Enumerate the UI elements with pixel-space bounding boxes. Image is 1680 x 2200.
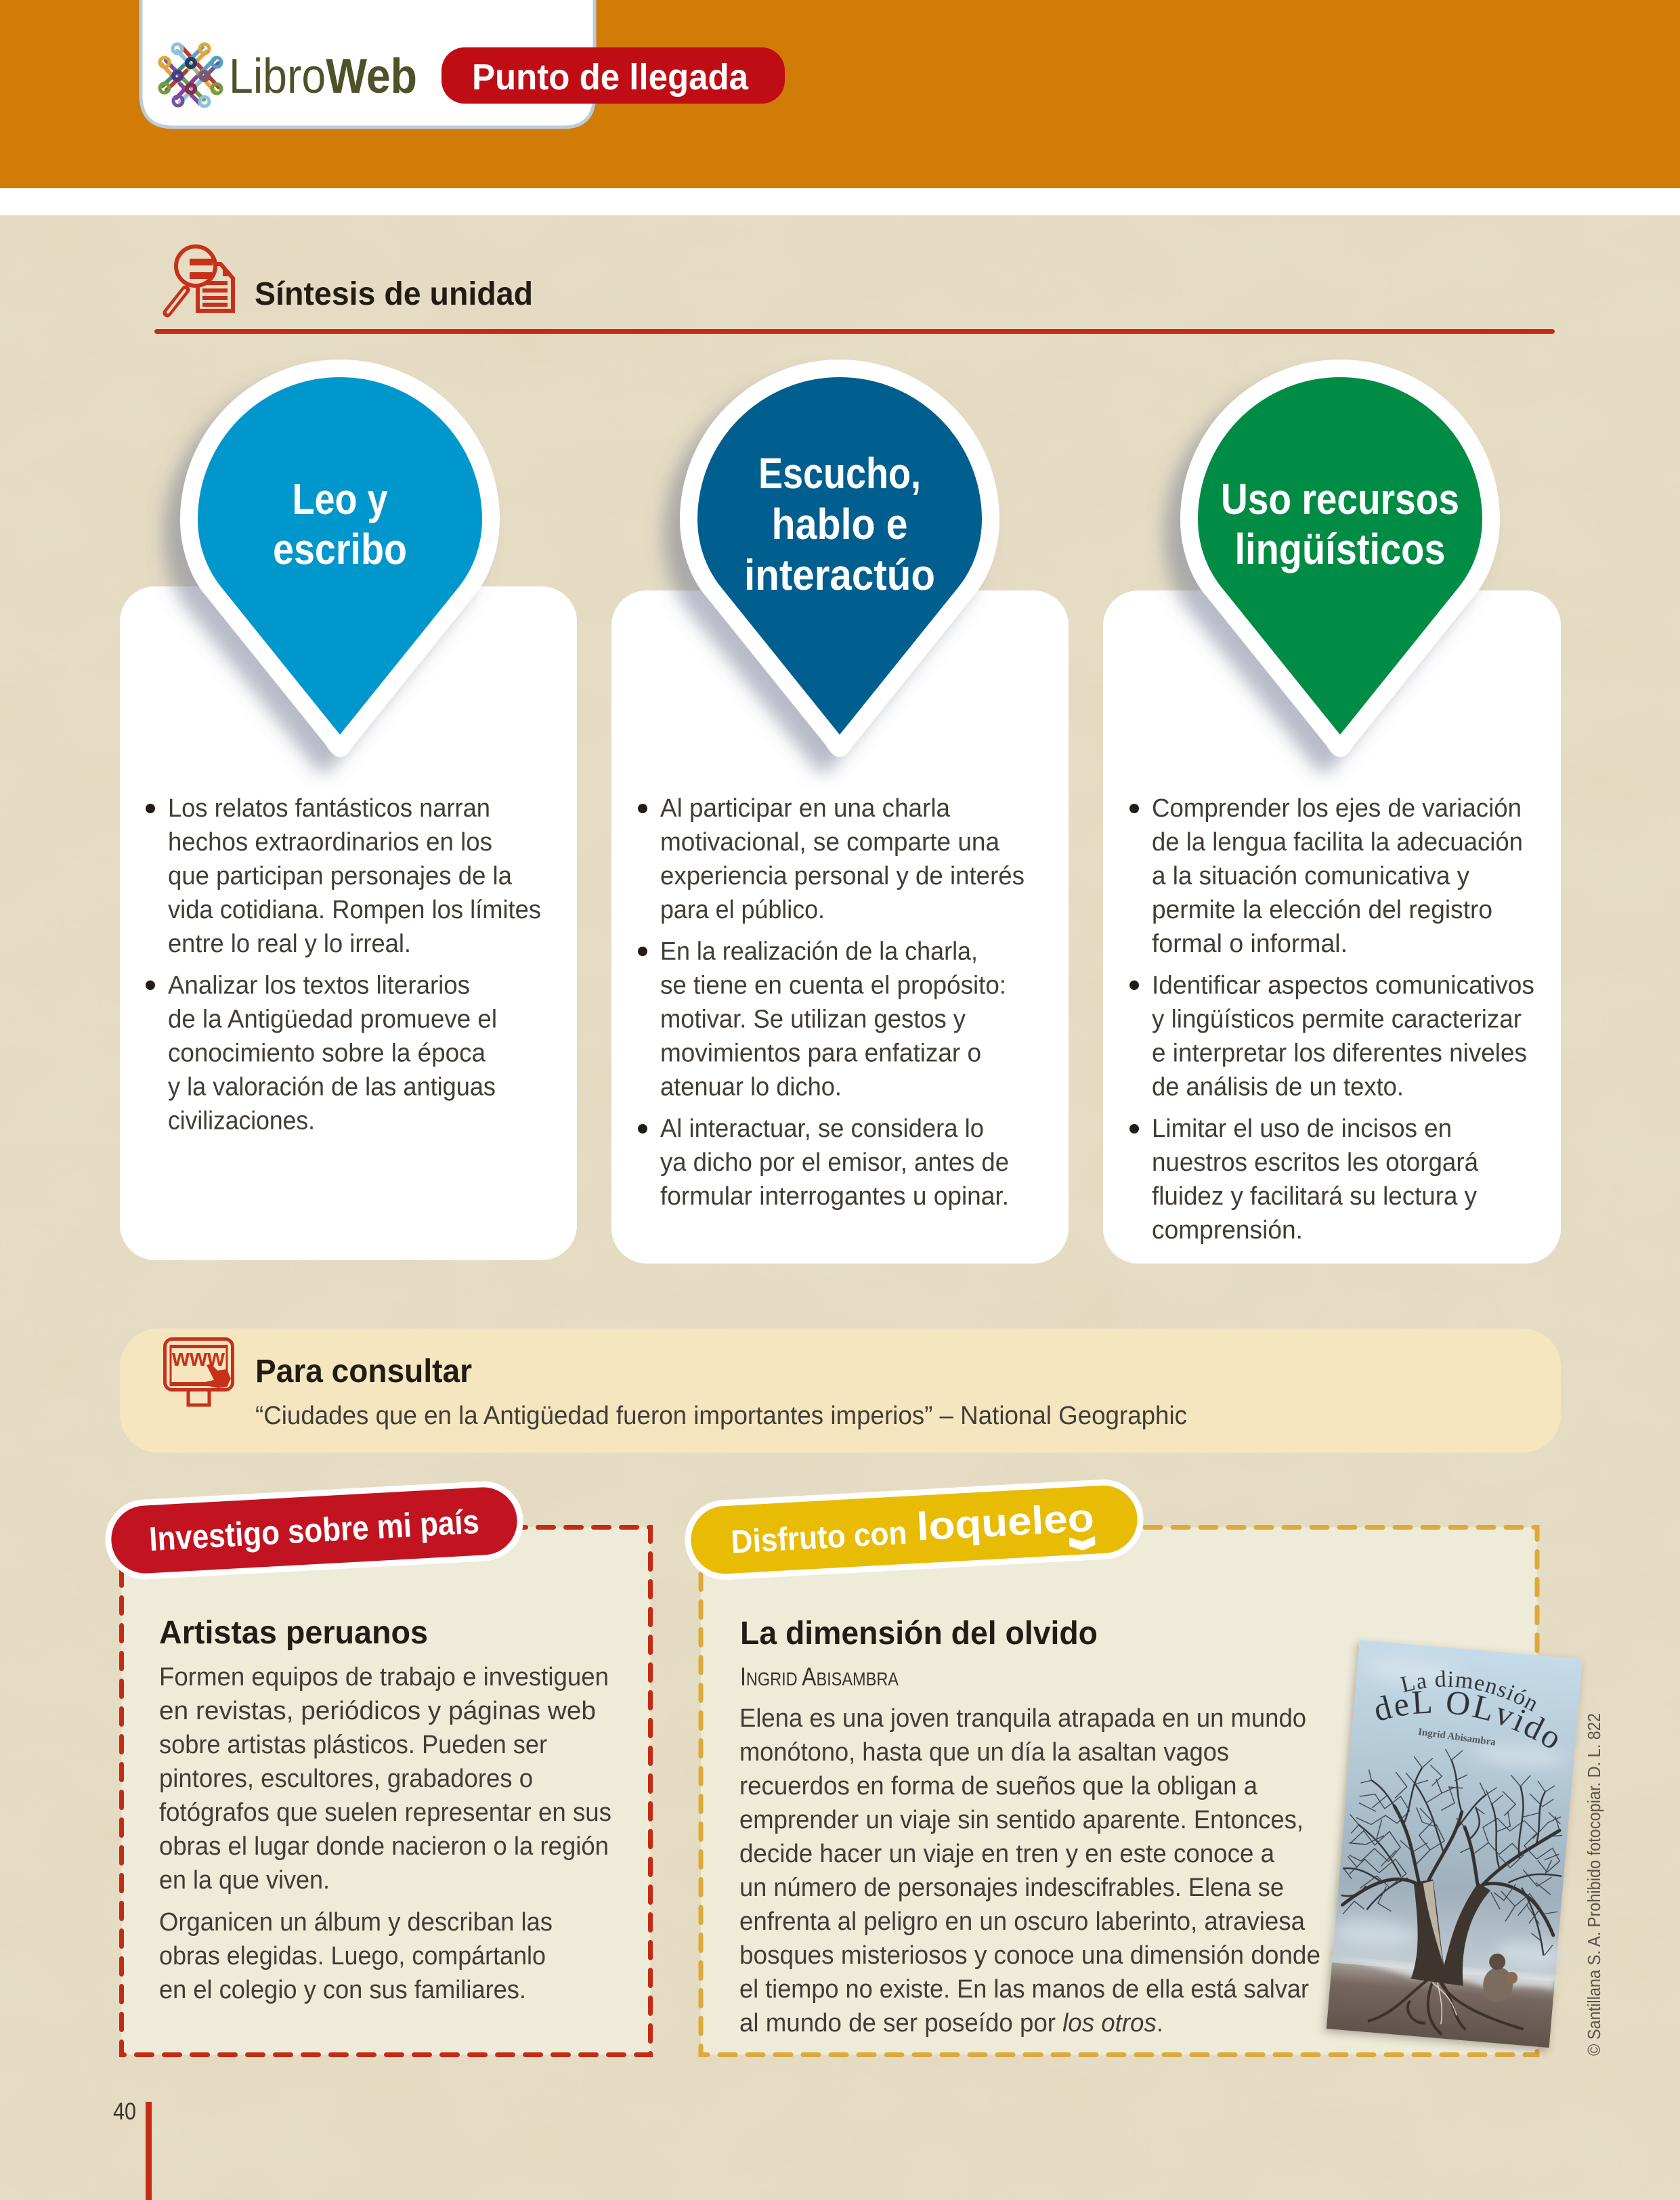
body text: Artistas peruanos: Formen equipos de trabajo e investiguen: [159, 1663, 609, 1691]
header tab with logo: [141, 0, 595, 127]
badge: Disfruto con loqueleo: Disfruto con: [730, 1515, 908, 1561]
body text: La dimensión del olvido: decide hacer un viaje en tren y en este conoce a: [739, 1840, 1275, 1868]
body text: Artistas peruanos: obras elegidas. Luego, compártanlo: [159, 1942, 546, 1970]
body text: La dimensión del olvido: al mundo de ser poseído por los otros.: [739, 2009, 1163, 2037]
bullets: Leo y escribo: entre lo real y lo irreal.: [168, 930, 411, 958]
bullets: Uso recursos lingüísticos: Identificar aspectos comunicativos: [1152, 971, 1534, 999]
body text: Artistas peruanos: en la que viven.: [159, 1866, 330, 1895]
panel: Para consultar: [120, 1329, 1561, 1452]
body text: Artistas peruanos: [159, 1663, 611, 2004]
body text: Artistas peruanos: en revistas, periódicos y páginas web: [159, 1697, 596, 1725]
bullets: Escucho, hablo e interactúo: ya dicho por el emisor, antes de: [660, 1148, 1009, 1177]
badge: Investigo sobre mi país: Investigo sobre mi país: [148, 1503, 480, 1558]
panel: Disfruto con loqueleo: [685, 1479, 1585, 2057]
badge: Disfruto con loqueleo: loqueleo: [916, 1496, 1095, 1549]
icon: LibroWeb woven logo: [160, 44, 221, 106]
bullets: Leo y escribo: de la Antigüedad promueve el: [168, 1005, 497, 1033]
bullets: Leo y escribo: Los relatos fantásticos narran: [168, 794, 490, 823]
orange header band: [0, 0, 1680, 188]
panel: Leo y escribo: [120, 360, 577, 1260]
body text: Artistas peruanos: en el colegio y con sus familiares.: [159, 1976, 526, 2004]
page number: 40: [113, 2098, 136, 2125]
logo wordmark: LibroWeb: [229, 49, 417, 104]
panel: Investigo sobre mi país: [110, 1486, 651, 2054]
bullets: Uso recursos lingüísticos: fluidez y facilitará su lectura y: [1152, 1182, 1477, 1211]
body text: Artistas peruanos: obras el lugar donde nacieron o la región: [159, 1832, 609, 1861]
bullets: Escucho, hablo e interactúo: atenuar lo dicho.: [660, 1073, 842, 1101]
pin: Leo y escribo: [180, 360, 500, 757]
body text: Artistas peruanos: fotógrafos que suelen representar en sus: [159, 1798, 611, 1827]
badge: Punto de llegada: [441, 47, 785, 104]
icon: magnifier over document: [167, 246, 233, 313]
cover title: Ingrid Abisambra: [1417, 1727, 1496, 1748]
cover clouds: [1333, 1655, 1588, 1968]
badge: Investigo sobre mi país: [110, 1486, 519, 1575]
bullets: Uso recursos lingüísticos: a la situación comunicativa y: [1152, 862, 1469, 890]
panel: Uso recursos lingüísticos: [1103, 360, 1561, 1264]
body text: Artistas peruanos: Organicen un álbum y describan las: [159, 1908, 553, 1937]
bullets: Uso recursos lingüísticos: de la lengua facilita la adecuación: [1152, 828, 1523, 857]
body text: La dimensión del olvido: Elena es una joven tranquila atrapada en un mundo: [739, 1704, 1306, 1733]
icon: www monitor: www: [171, 1343, 225, 1371]
bullets: Leo y escribo: hechos extraordinarios en los: [168, 828, 492, 857]
bullets: Escucho, hablo e interactúo: [638, 794, 1025, 1211]
cover title: deL OLvido: [1376, 1691, 1557, 1748]
bullets: Uso recursos lingüísticos: de análisis de un texto.: [1152, 1073, 1404, 1101]
body text: La dimensión del olvido: emprender un viaje sin sentido aparente. Entonces,: [739, 1806, 1304, 1834]
bullets: Escucho, hablo e interactúo: Al participar en una charla: [660, 794, 951, 823]
section rule: [154, 329, 1555, 334]
page number rule: [146, 2102, 152, 2200]
cover title: La dimensión: [1400, 1670, 1536, 1712]
credit: vertical copyright line: © Santillana S. A. Prohibido fotocopiar. D. L. 822: [1584, 1713, 1604, 2056]
bullets: Escucho, hablo e interactúo: motivar. Se utilizan gestos y: [660, 1005, 966, 1033]
bullets: Uso recursos lingüísticos: Comprender los ejes de variación: [1152, 794, 1522, 823]
pin: Uso recursos lingüísticos: Uso recursos: [1221, 475, 1459, 523]
cover ground: [1327, 1957, 1555, 2048]
cover tree: [1335, 1742, 1571, 1993]
pin: Leo y escribo: Leo y: [293, 475, 388, 523]
bullets: Escucho, hablo e interactúo: para el público.: [660, 896, 825, 924]
white strip: [0, 188, 1680, 215]
bullets: Leo y escribo: y la valoración de las antiguas: [168, 1073, 496, 1101]
heading: Para consultar: Para consultar: [255, 1354, 472, 1389]
badge: Disfruto con loqueleo: [689, 1484, 1139, 1576]
bullets: Escucho, hablo e interactúo: se tiene en cuenta el propósito:: [660, 971, 1006, 999]
icon: www monitor: [165, 1339, 233, 1405]
pin: Leo y escribo: escribo: [273, 525, 407, 574]
pin: Uso recursos lingüísticos: [1180, 360, 1500, 757]
cover figure: [1482, 1953, 1520, 2004]
bullets: Escucho, hablo e interactúo: formular interrogantes u opinar.: [660, 1182, 1009, 1211]
bullets: Leo y escribo: [146, 794, 541, 1135]
bullets: Uso recursos lingüísticos: e interpretar los diferentes niveles: [1152, 1039, 1527, 1067]
body text: Artistas peruanos: sobre artistas plásticos. Pueden ser: [159, 1731, 547, 1759]
bullets: Escucho, hablo e interactúo: movimientos para enfatizar o: [660, 1039, 981, 1067]
bullets: Escucho, hablo e interactúo: motivacional, se comparte una: [660, 828, 1000, 857]
body text: La dimensión del olvido: enfrenta al peligro en un oscuro laberinto, atraviesa: [739, 1907, 1306, 1936]
body text: La dimensión del olvido: monótono, hasta que un día la asaltan vagos: [739, 1738, 1229, 1767]
body text: La dimensión del olvido: un número de personajes indescifrables. Elena se: [739, 1874, 1284, 1902]
bullets: Leo y escribo: vida cotidiana. Rompen los límites: [168, 896, 541, 924]
badge: Punto de llegada: Punto de llegada: [472, 57, 749, 98]
pin: Escucho, hablo e interactúo: Escucho,: [758, 449, 921, 498]
bullets: Escucho, hablo e interactúo: Al interactuar, se considera lo: [660, 1115, 984, 1143]
panel: Escucho, hablo e interactúo: [611, 360, 1069, 1264]
bullets: Uso recursos lingüísticos: formal o informal.: [1152, 930, 1348, 958]
bullets: Uso recursos lingüísticos: Limitar el uso de incisos en: [1152, 1115, 1452, 1143]
body text: Artistas peruanos: pintores, escultores, grabadores o: [159, 1765, 533, 1793]
heading: La dimensión del olvido: La dimensión del olvido: [740, 1616, 1098, 1652]
pin: Uso recursos lingüísticos: lingüísticos: [1235, 525, 1445, 574]
author: Ingrid Abisambra: INGRID ABISAMBRA: [740, 1663, 899, 1691]
bullets: Uso recursos lingüísticos: y lingüísticos permite caracterizar: [1152, 1005, 1522, 1033]
bullets: Uso recursos lingüísticos: nuestros escritos les otorgará: [1152, 1148, 1479, 1177]
bullets: Leo y escribo: que participan personajes de la: [168, 862, 513, 890]
reference line: “Ciudades que en la Antigüedad fueron importantes imperios” – National Geographic: [255, 1402, 1187, 1430]
bullets: Uso recursos lingüísticos: [1129, 794, 1534, 1245]
body text: La dimensión del olvido: [739, 1704, 1320, 2037]
bullets: Leo y escribo: conocimiento sobre la época: [168, 1039, 486, 1067]
pin: Escucho, hablo e interactúo: hablo e: [772, 500, 907, 548]
pin: Escucho, hablo e interactúo: interactúo: [744, 551, 935, 599]
body text: La dimensión del olvido: bosques misteriosos y conoce una dimensión donde: [739, 1941, 1320, 1970]
heading: Artistas peruanos: Artistas peruanos: [159, 1615, 428, 1651]
body text: La dimensión del olvido: recuerdos en forma de sueños que la obligan a: [739, 1772, 1258, 1800]
pin: Escucho, hablo e interactúo: [680, 360, 999, 757]
book cover: La dimensión del olvido: [1320, 1639, 1585, 2055]
bullets: Leo y escribo: Analizar los textos literarios: [168, 971, 470, 999]
bullets: Uso recursos lingüísticos: comprensión.: [1152, 1216, 1303, 1245]
heading: Síntesis de unidad: Síntesis de unidad: [255, 276, 533, 312]
bullets: Escucho, hablo e interactúo: experiencia personal y de interés: [660, 862, 1025, 890]
bullets: Leo y escribo: civilizaciones.: [168, 1106, 315, 1135]
bullets: Escucho, hablo e interactúo: En la realización de la charla,: [660, 937, 978, 966]
bullets: Uso recursos lingüísticos: permite la elección del registro: [1152, 896, 1492, 924]
body text: La dimensión del olvido: el tiempo no existe. En las manos de ella está salvar: [739, 1975, 1309, 2004]
